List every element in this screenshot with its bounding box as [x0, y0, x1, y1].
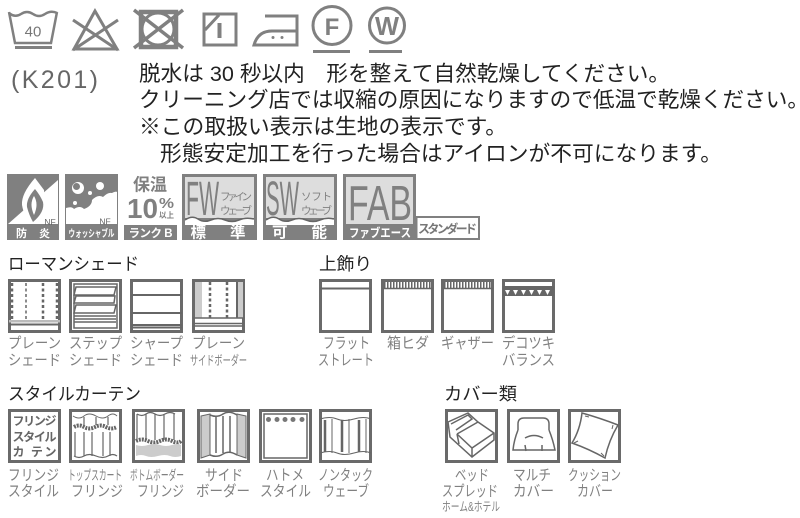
- label: [130, 335, 183, 369]
- label: 箱ヒダ: [387, 335, 429, 352]
- icon: multi cover: [508, 410, 558, 462]
- care instructions text: [139, 61, 800, 166]
- label: サイドボーダー: [190, 353, 247, 368]
- label: [502, 334, 555, 369]
- icon: fringe style curtain: カ テン: [12, 445, 56, 459]
- label: [69, 335, 122, 369]
- label: ステップ: [69, 335, 122, 352]
- heading: roman shade: ローマンシェード: [8, 254, 139, 274]
- label: プレーン: [192, 335, 245, 352]
- label: ウェーブ: [323, 482, 369, 500]
- label: スプレッド: [442, 483, 498, 500]
- icon: wash tub 40: [9, 12, 57, 49]
- label: ホーム&ホテル: [442, 500, 500, 514]
- badge: heat retention: 10: [127, 193, 158, 224]
- panel: covers: [442, 410, 621, 514]
- icon: fringe style curtain: [10, 410, 60, 462]
- heading: covers: カバー類: [444, 384, 518, 404]
- product code: (K201): [11, 66, 98, 94]
- badge: FAB fab ace standard: [343, 174, 479, 240]
- label: [8, 335, 61, 369]
- label: [318, 467, 373, 500]
- icon: dry clean F: [313, 6, 351, 53]
- badge: SW soft wave: [263, 173, 337, 242]
- panel: roman shades: [8, 280, 247, 369]
- badge: SW soft wave: ソフト: [301, 191, 332, 203]
- icon: wash tub 40: 40: [25, 24, 41, 40]
- label: [442, 467, 500, 514]
- icon: box pleat: [382, 280, 433, 332]
- badge: flame retardant: 防 炎: [16, 226, 50, 240]
- care instructions text: ※この取扱い表示は生地の表示です。: [139, 114, 507, 139]
- badge: FAB fab ace standard: ファブエース: [349, 225, 411, 240]
- icon: top skirt fringe: [70, 410, 120, 462]
- label: [513, 467, 554, 500]
- badge: heat retention: 以上: [159, 210, 174, 220]
- label: [318, 335, 374, 369]
- icon: plain side border: [193, 280, 244, 332]
- icon: bed spread: [446, 410, 496, 462]
- label: シェード: [130, 352, 183, 369]
- badge: heat retention: ランク B: [128, 227, 172, 240]
- icon: line dry: [204, 14, 236, 45]
- label: クッション: [568, 467, 621, 484]
- badge: FW fine wave: ウェーブ: [220, 204, 252, 217]
- badge: flame retardant: NF: [44, 217, 56, 227]
- badge: FW fine wave: ファイン: [220, 191, 252, 203]
- label: カバー: [513, 483, 554, 500]
- icon: wet clean W: W: [375, 11, 399, 41]
- label: [196, 467, 250, 500]
- label: ハトメ: [266, 467, 304, 484]
- feature badges row: [7, 173, 479, 242]
- icon: fringe style curtain: フリンジ: [12, 414, 56, 428]
- icon: plain shade: [9, 280, 60, 332]
- label: [8, 467, 59, 500]
- icon: iron: [254, 16, 297, 45]
- label: デコツキ: [502, 334, 555, 352]
- badge: FW fine wave: FW: [186, 173, 219, 226]
- badge: heat retention: %: [159, 195, 174, 212]
- icon: dry clean F: F: [325, 14, 339, 41]
- care instructions text: クリーニング店では収縮の原因になりますので低温で乾燥ください。: [139, 87, 800, 112]
- label: フリンジ: [8, 467, 59, 484]
- panel: top treatments: [318, 280, 555, 369]
- badge: FAB fab ace standard: スタンダード: [418, 221, 477, 236]
- heading: top treatment: 上飾り: [319, 254, 372, 274]
- label: [130, 468, 184, 500]
- badge: washable: NF: [99, 216, 111, 226]
- label: スタイル: [260, 483, 311, 500]
- badge: flame retardant: [7, 174, 59, 240]
- label: ボーダー: [196, 483, 250, 500]
- label: フリンジ: [71, 483, 123, 500]
- label: ギャザー: [441, 335, 494, 352]
- badge: FW fine wave: 標 準: [190, 222, 246, 242]
- heading: style curtain: スタイルカーテン: [8, 384, 141, 404]
- label: ベッド: [455, 467, 489, 484]
- icon: flat straight: [320, 280, 371, 332]
- label: スタイル: [8, 483, 59, 500]
- label: サイド: [205, 467, 243, 484]
- icon: side border curtain: [198, 410, 248, 462]
- icon: no bleach: [73, 11, 118, 50]
- icon: decorated balance: [503, 280, 554, 332]
- icon: fringe style curtain: スタイル: [12, 430, 56, 444]
- badge: SW soft wave: ウェーブ: [301, 204, 332, 217]
- label: シェード: [8, 352, 61, 369]
- label: フリンジ: [137, 483, 184, 500]
- label: ストレート: [318, 352, 374, 369]
- icon: bottom border fringe: [134, 410, 184, 462]
- label: シェード: [69, 352, 122, 369]
- label: バランス: [502, 352, 555, 369]
- label: シャープ: [130, 335, 183, 352]
- badge: SW soft wave: 可 能: [272, 222, 327, 242]
- care symbols row: [9, 6, 404, 53]
- icon: no tumble dry: [134, 10, 183, 48]
- label: ボトムボーダー: [130, 468, 184, 483]
- label: [68, 468, 123, 500]
- label: [260, 467, 311, 500]
- label: [190, 335, 247, 368]
- care instructions text: 形態安定加工を行った場合はアイロンが不可になります。: [160, 141, 722, 166]
- badge: SW soft wave: SW: [266, 173, 299, 226]
- label: ノンタック: [318, 467, 373, 484]
- icon: non-tack wave: [320, 410, 371, 462]
- panel: style curtains: [8, 410, 373, 500]
- label: トップスカート: [68, 468, 122, 483]
- badge: heat retention: [124, 176, 177, 240]
- label: カバー: [577, 483, 613, 500]
- icon: gather: [442, 280, 493, 332]
- label: マルチ: [513, 467, 551, 484]
- badge: washable: [65, 174, 118, 240]
- label: フラット: [323, 335, 370, 352]
- icon: wet clean W: [369, 8, 404, 53]
- icon: sharp shade: [131, 280, 182, 332]
- label: プレーン: [8, 335, 61, 352]
- badge: heat retention: 保温: [133, 176, 167, 194]
- badge: washable: ウォッシャブル: [68, 227, 114, 240]
- badge: FAB fab ace standard: FAB: [348, 177, 412, 231]
- icon: grommet style: [260, 410, 310, 462]
- label: [568, 467, 621, 500]
- icon: cushion cover: [570, 410, 620, 462]
- icon: step shade: [70, 280, 120, 332]
- care instructions text: 脱水は 30 秒以内 形を整えて自然乾燥してください。: [139, 61, 670, 86]
